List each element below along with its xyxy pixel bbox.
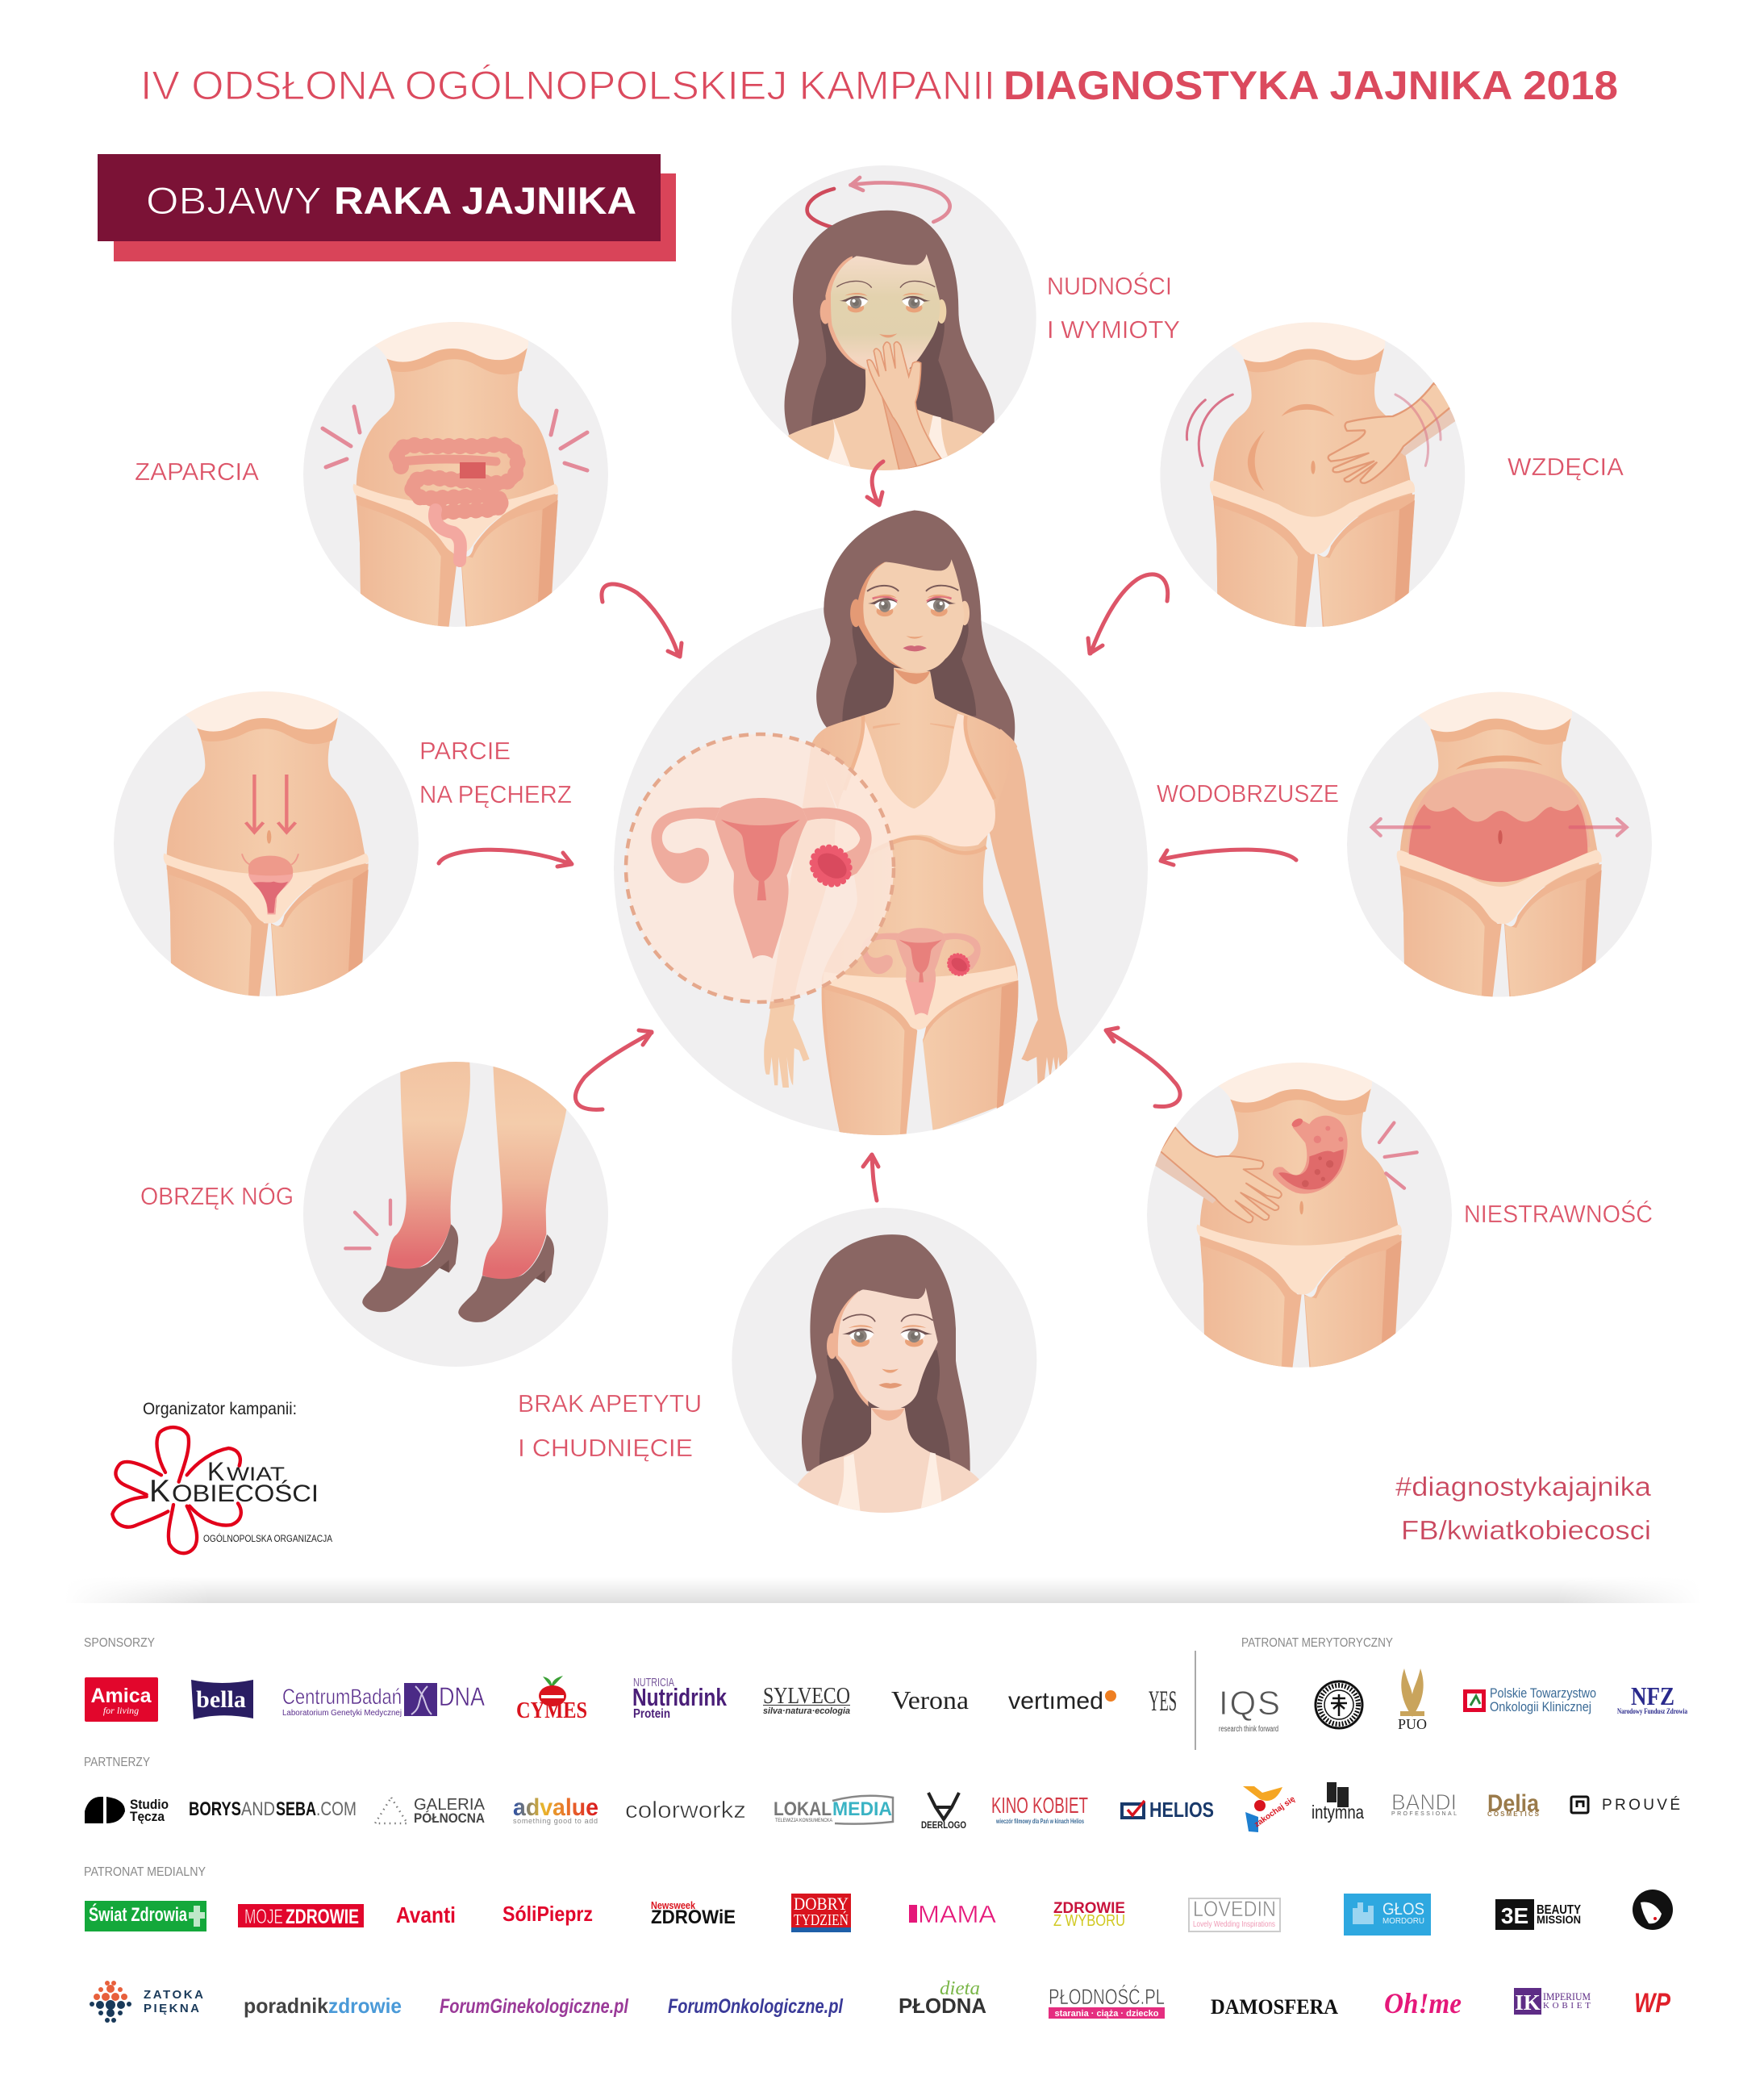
- intestines: [397, 445, 518, 561]
- logo: moje zdrowie: ZDROWIE: [286, 1906, 359, 1928]
- logo: amica: for living: [103, 1705, 139, 1716]
- logo: lokalmedia: LOKAL: [774, 1798, 832, 1820]
- logo: kino kobiet: [991, 1793, 1088, 1825]
- label: nudności i wymioty: [1047, 271, 1180, 344]
- logo: helios: [1122, 1798, 1214, 1822]
- logo: dieta płodna: PŁODNA: [899, 1994, 986, 2018]
- logo: helios: HELIOS: [1149, 1798, 1214, 1822]
- logo: kino kobiet: KINO KOBIET: [991, 1793, 1088, 1818]
- logo: beauty mission: 3E: [1501, 1903, 1528, 1928]
- logo: cymes: CYMES: [516, 1698, 587, 1723]
- section headings: SPONSORZY: [84, 1636, 155, 1650]
- logo: delia: Delia: [1487, 1790, 1539, 1817]
- logo: płodność.pl: starania · ciąża · dziecko: [1055, 2009, 1159, 2019]
- logo: imperium kobiet: IMPERIUM: [1543, 1990, 1591, 2002]
- logo: dieta płodna: dieta: [940, 1978, 980, 1999]
- logo: intymna: [1312, 1782, 1364, 1823]
- logo: świat zdrowia: [85, 1901, 206, 1931]
- logo: beauty mission: [1495, 1899, 1581, 1930]
- title: [140, 63, 1618, 108]
- logo: borysandseba: [189, 1798, 357, 1820]
- logo: dieta płodna: [899, 1978, 986, 2018]
- logo: sylveco: [763, 1684, 850, 1716]
- label: zaparcia: ZAPARCIA: [135, 457, 259, 486]
- logo: delia: COSMETICS: [1487, 1810, 1540, 1818]
- logo: kwiat kobiecości: K: [149, 1474, 170, 1509]
- logo: lokalmedia: MEDIA: [832, 1798, 892, 1820]
- logo: borysandseba: SEBA: [276, 1798, 316, 1820]
- logo: damosfera: DAMOSFERA: [1211, 1995, 1338, 2019]
- logo: amica: [85, 1677, 158, 1722]
- shadow divider: [65, 1573, 1702, 1606]
- logo: zdrowie z wyboru: [1053, 1900, 1125, 1930]
- panel: nudności i wymioty: [732, 165, 1036, 474]
- panel: zaparcia: [303, 315, 608, 630]
- callout: magnifier with uterus: [626, 734, 894, 1002]
- logo: beauty mission: MISSION: [1537, 1913, 1581, 1926]
- logo: bella: [191, 1680, 253, 1719]
- section headings: [84, 1636, 1393, 1879]
- icon: shoes: [362, 1224, 458, 1312]
- logo: galeria północna: [375, 1796, 486, 1826]
- logo: forum onkologiczne: ForumOnkologiczne.pl: [668, 1995, 844, 2018]
- logo: vertimed: vertımed: [1008, 1688, 1103, 1714]
- label: brak apetytu i chudnięcie: I CHUDNIĘCIE: [518, 1434, 693, 1462]
- icon: stomach: [1273, 1116, 1348, 1194]
- logo: avanti: Avanti: [396, 1902, 456, 1927]
- panel: brak apetytu: [732, 1208, 1036, 1522]
- logo: kwiat kobiecości: WIAT: [227, 1464, 285, 1485]
- logo: zatoka piękna: PIĘKNA: [144, 2002, 199, 2015]
- logo: kino kobiet: wieczór filmowy dla Pań w kinach Helios: [995, 1818, 1084, 1825]
- logo: colorworkz: colorworkz: [625, 1798, 746, 1823]
- logo: zdrowie z wyboru: Z WYBORU: [1053, 1912, 1125, 1930]
- logo: imperium kobiet: IK: [1515, 1990, 1541, 2015]
- logo: kwiat kobiecości: [112, 1400, 332, 1553]
- icon: hand on belly: [1328, 383, 1456, 483]
- panel: parcie na pęcherz: [114, 684, 419, 1000]
- heading banner: objawy raka jajnika: OBJAWY: [146, 179, 322, 222]
- logo: kwiat kobiecości: K: [207, 1457, 224, 1486]
- logo: ptok: [1463, 1685, 1596, 1714]
- logo row: partners: [85, 1782, 1680, 1832]
- logo: intymna: intymna: [1312, 1802, 1364, 1823]
- logo: centrum badań dna: CentrumBadań: [282, 1685, 402, 1709]
- heading banner: objawy raka jajnika: RAKA JAJNIKA: [334, 179, 636, 222]
- logo: galeria północna: GALERIA: [414, 1796, 486, 1814]
- logo: centrum badań dna: [282, 1682, 486, 1718]
- logo: dobry tydzień: DOBRY: [794, 1894, 849, 1914]
- logo: moje zdrowie: [238, 1904, 364, 1928]
- title: IV ODSŁONA OGÓLNOPOLSKIEJ KAMPANII: [140, 63, 995, 108]
- panel: niestrawność: [1147, 1055, 1452, 1371]
- logo: ptok: Onkologii Klinicznej: [1490, 1699, 1591, 1714]
- logo: płodność.pl: [1049, 1983, 1165, 2019]
- logo: głos mordoru: GŁOS: [1382, 1900, 1424, 1919]
- logo: lovedin: [1189, 1897, 1280, 1931]
- logo: verona: Verona: [891, 1685, 969, 1714]
- panel: obrzęk nóg: [303, 1057, 608, 1367]
- logo: yes: YES: [1149, 1685, 1177, 1717]
- logo: puo: PUO: [1398, 1716, 1427, 1732]
- hashtag text: [1395, 1472, 1652, 1545]
- logo: deerlogo: DEERLOGO: [921, 1819, 966, 1831]
- logo: puo: [1398, 1668, 1427, 1732]
- logo: imperium kobiet: KOBIET: [1543, 2001, 1591, 2011]
- logo: ptok: Polskie Towarzystwo: [1490, 1685, 1596, 1701]
- logo: głos mordoru: [1344, 1894, 1431, 1936]
- logo: nutridrink: [632, 1676, 728, 1721]
- label: brak apetytu i chudnięcie: BRAK APETYTU: [518, 1389, 702, 1418]
- label: parcie na pęcherz: NA PĘCHERZ: [419, 780, 572, 808]
- icon: small uterus: [861, 928, 981, 1015]
- logo: nfz: Narodowy Fundusz Zdrowia: [1617, 1707, 1687, 1715]
- logo: dobra mama: MAMA: [918, 1900, 996, 1928]
- logo: borysandseba: BORYS: [189, 1798, 241, 1820]
- heading banner: objawy raka jajnika: [98, 154, 676, 261]
- logo: iqs: research think forward: [1219, 1725, 1278, 1734]
- logo: lokalmedia: TELEWIZJA KONSUMENCKA: [775, 1819, 832, 1823]
- logo: poradnik zdrowie: poradnik: [244, 1994, 329, 2018]
- logo: newsweek zdrowie: Newsweek: [651, 1899, 696, 1911]
- logo: amica: Amica: [90, 1685, 152, 1707]
- logo: lovedin: Lovely Wedding Inspirations: [1193, 1920, 1275, 1929]
- section headings: PATRONAT MEDIALNY: [84, 1865, 206, 1879]
- logo: dobry tydzień: [791, 1894, 851, 1932]
- logo: sylveco: silva·natura·ecologia: [763, 1706, 850, 1716]
- label: brak apetytu i chudnięcie: [518, 1389, 702, 1462]
- logo: borysandseba: .COM: [316, 1798, 357, 1820]
- logo: nutridrink: NUTRICIA: [633, 1676, 674, 1689]
- logo: dobry tydzień: TYDZIEŃ: [794, 1911, 849, 1929]
- logo: oh!me: Oh!me: [1384, 1987, 1462, 2019]
- section headings: PATRONAT MERYTORYCZNY: [1241, 1636, 1393, 1650]
- section headings: PARTNERZY: [84, 1756, 150, 1769]
- label: parcie na pęcherz: [419, 737, 572, 808]
- logo: nutridrink: Nutridrink: [632, 1683, 728, 1711]
- logo: kwiat kobiecości: OGÓLNOPOLSKA ORGANIZACJA: [203, 1532, 332, 1544]
- logo: studio tęcza: Studio: [130, 1797, 169, 1812]
- logo: centrum badań dna: DNA: [439, 1682, 486, 1711]
- logo: kwiat kobiecości: OBIECOŚCI: [172, 1480, 319, 1507]
- logo: nutridrink: Protein: [633, 1707, 670, 1721]
- logo: wp: WP: [1634, 1988, 1670, 2019]
- logo: galeria północna: PÓŁNOCNA: [414, 1810, 485, 1826]
- logo: bandi: BANDI: [1391, 1789, 1457, 1814]
- panel: central figure: [614, 511, 1148, 1136]
- logo: cymes: [516, 1676, 587, 1723]
- logo: borysandseba: AND: [241, 1798, 275, 1820]
- logo: figo seal: [1316, 1681, 1362, 1728]
- logo: forum ginekologiczne: ForumGinekologiczne.pl: [440, 1995, 629, 2018]
- logo row: media 2: [90, 1978, 1670, 2023]
- arrows: [439, 461, 1296, 1201]
- logo: bandi: PROFESSIONAL: [1391, 1811, 1457, 1817]
- logo: round portrait: [1633, 1890, 1673, 1930]
- logo: newsweek zdrowie: ZDROWiE: [651, 1906, 736, 1928]
- logo: prouvé: PROUVÉ: [1602, 1797, 1680, 1814]
- logo: zakochaj się w warszawie: zakochaj się: [1253, 1794, 1297, 1829]
- logo: poradnik zdrowie: [244, 1994, 402, 2018]
- logo: płodność.pl: PŁODNOŚĆ.PL: [1049, 1983, 1165, 2009]
- logo: świat zdrowia: Świat Zdrowia: [89, 1903, 187, 1926]
- hashtag text: FB/kwiatkobiecosci: [1401, 1515, 1651, 1545]
- logo: nfz: NFZ: [1631, 1681, 1674, 1710]
- logo: lovedin: LOVEDIN: [1193, 1897, 1276, 1921]
- label: wzdęcia: WZDĘCIA: [1508, 453, 1624, 481]
- logo: bella: bella: [196, 1686, 246, 1713]
- logo: beauty mission: BEAUTY: [1537, 1903, 1581, 1917]
- logo: zdrowie z wyboru: ZDROWIE: [1053, 1900, 1125, 1917]
- logo: zatoka piękna: [90, 1981, 203, 2023]
- logo: moje zdrowie: MOJE: [244, 1906, 283, 1928]
- logo: iqs: IQS: [1219, 1684, 1280, 1722]
- hashtag text: #diagnostykajajnika: [1395, 1472, 1652, 1501]
- label: nudności i wymioty: I WYMIOTY: [1047, 315, 1180, 344]
- logo: imperium kobiet: [1514, 1988, 1591, 2015]
- logo: sylveco: SYLVECO: [763, 1684, 850, 1709]
- logo: studio tęcza: Tęcza: [130, 1809, 165, 1824]
- logo: kwiat kobiecości: Organizator kampanii:: [143, 1400, 297, 1418]
- logo: centrum badań dna: Laboratorium Genetyki Medycznej: [282, 1709, 402, 1718]
- panel: wzdęcia: [1160, 315, 1465, 631]
- logo row: sponsors: [85, 1668, 1687, 1734]
- label: nudności i wymioty: NUDNOŚCI: [1047, 271, 1172, 300]
- logo: głos mordoru: MORDORU: [1382, 1917, 1424, 1926]
- label: obrzęk nóg: OBRZĘK NÓG: [140, 1182, 294, 1210]
- label: parcie na pęcherz: PARCIE: [419, 737, 511, 765]
- title: DIAGNOSTYKA JAJNIKA 2018: [1003, 63, 1618, 108]
- logo: deerlogo: [921, 1793, 966, 1831]
- icon: hand: [1153, 1127, 1282, 1222]
- logo: sól i pieprz: SóliPieprz: [503, 1902, 593, 1926]
- label: niestrawność: NIESTRAWNOŚĆ: [1464, 1199, 1653, 1228]
- logo: nfz: [1617, 1681, 1687, 1715]
- label: wodobrzusze: WODOBRZUSZE: [1157, 779, 1339, 808]
- panel: wodobrzusze: [1347, 684, 1652, 1000]
- logo: lokalmedia: [774, 1796, 893, 1824]
- logo: studio tęcza: [85, 1797, 169, 1824]
- logo: zatoka piękna: ZATOKA: [144, 1988, 203, 2002]
- logo row: media 1: [85, 1890, 1673, 1936]
- logo: advalue: advalue: [513, 1794, 598, 1821]
- logo: zakochaj się w warszawie: [1243, 1786, 1297, 1832]
- logo: poradnik zdrowie: zdrowie: [328, 1994, 402, 2018]
- logo: advalue: something good to add: [513, 1817, 598, 1825]
